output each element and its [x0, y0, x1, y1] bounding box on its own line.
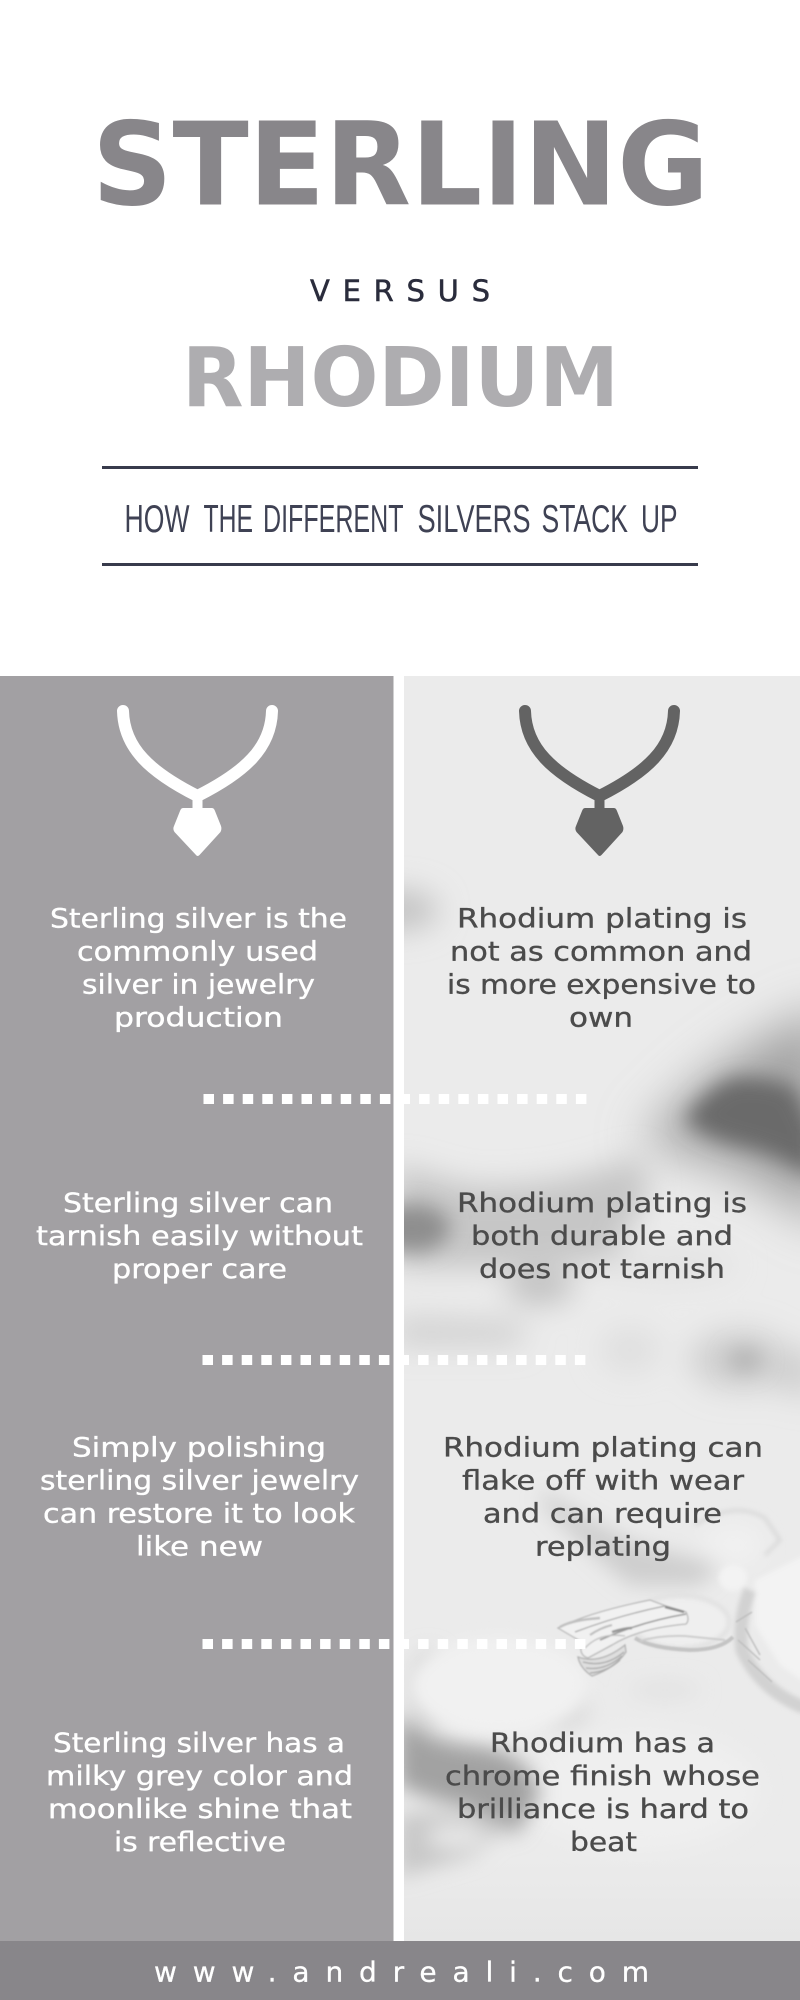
text: sterling row 1: Sterling silver is the [50, 904, 347, 934]
text: rhodium row 2 [457, 1188, 747, 1285]
rule: bottom of subtitle [102, 563, 698, 566]
footer bar [0, 1941, 800, 2000]
clasp strands [558, 1600, 688, 1676]
dotted divider 2 [202, 1355, 585, 1365]
text: rhodium row 3: Rhodium plating can [443, 1432, 763, 1464]
text: sterling row 3: sterling silver jewelry [40, 1466, 359, 1496]
text: rhodium row 3: and can require [483, 1498, 722, 1530]
heading: versus: VERSUS [310, 274, 490, 308]
text: rhodium row 1: not as common and [450, 936, 752, 968]
shadow around chain [542, 1494, 714, 1726]
text: rhodium row 4 [445, 1728, 760, 1858]
title: Rhodium: RHODIUM [182, 331, 619, 426]
photo background: blurred jewelry [362, 676, 800, 1941]
text: sterling row 3: Simply polishing [72, 1432, 326, 1464]
text: sterling row 3: like new [136, 1532, 263, 1562]
text: sterling row 4: is reflective [114, 1827, 286, 1858]
subtitle: HOW [124, 498, 190, 541]
text: sterling row 1 [50, 904, 347, 1034]
text: rhodium row 1 [447, 904, 756, 1034]
panel: rhodium [362, 676, 800, 1941]
text: rhodium row 3 [443, 1432, 763, 1562]
text: sterling row 1: silver in jewelry [82, 970, 315, 1000]
dotted divider 1 [204, 1094, 586, 1104]
subtitle: THE [204, 498, 253, 541]
text: sterling row 4: Sterling silver has a [53, 1728, 345, 1759]
subtitle: UP [641, 498, 678, 541]
text: rhodium row 3: replating [535, 1532, 671, 1562]
text: sterling row 4: milky grey color and [46, 1761, 353, 1792]
subtitle [124, 498, 678, 541]
text: sterling row 3: can restore it to look [43, 1498, 355, 1530]
text: sterling row 2: Sterling silver can [63, 1188, 333, 1219]
text: rhodium row 4: Rhodium has a [490, 1728, 715, 1759]
title: Sterling: STERLING [92, 98, 709, 232]
text: sterling row 3 [40, 1432, 359, 1562]
text: rhodium row 2: Rhodium plating is [457, 1188, 747, 1219]
text: rhodium row 3: flake off with wear [462, 1466, 745, 1496]
text: sterling row 2 [36, 1188, 363, 1285]
text: sterling row 1: production [114, 1002, 283, 1034]
dotted divider 3 [202, 1639, 585, 1649]
text: rhodium row 2: both durable and [471, 1221, 733, 1252]
text: rhodium row 4: chrome finish whose [445, 1761, 760, 1792]
text: rhodium row 1: Rhodium plating is [457, 904, 747, 934]
icon: dark necklace [525, 711, 674, 856]
right disc [734, 1573, 800, 1714]
text: sterling row 1: commonly used [77, 936, 318, 968]
panel: sterling silver [0, 676, 394, 1941]
text: rhodium row 2: does not tarnish [479, 1254, 725, 1285]
rule: top of subtitle [102, 466, 698, 469]
text: sterling row 4: moonlike shine that [48, 1794, 352, 1825]
chain ring bottom [635, 1637, 733, 1650]
subtitle: DIFFERENT [263, 498, 404, 541]
text: rhodium row 1: is more expensive to [447, 970, 756, 1000]
soft stone bottom-left [398, 1650, 540, 1878]
footer url: www.andreali.com [154, 1956, 649, 1988]
text: rhodium row 4: brilliance is hard to [457, 1794, 749, 1825]
text: sterling row 2: proper care [112, 1254, 287, 1285]
text: sterling row 4 [46, 1728, 353, 1858]
text: rhodium row 1: own [569, 1002, 633, 1034]
subtitle: STACK [542, 498, 628, 541]
text: rhodium row 4: beat [570, 1827, 637, 1858]
icon: white necklace [123, 711, 272, 856]
subtitle: SILVERS [418, 498, 530, 541]
text: sterling row 2: tarnish easily without [36, 1221, 363, 1252]
